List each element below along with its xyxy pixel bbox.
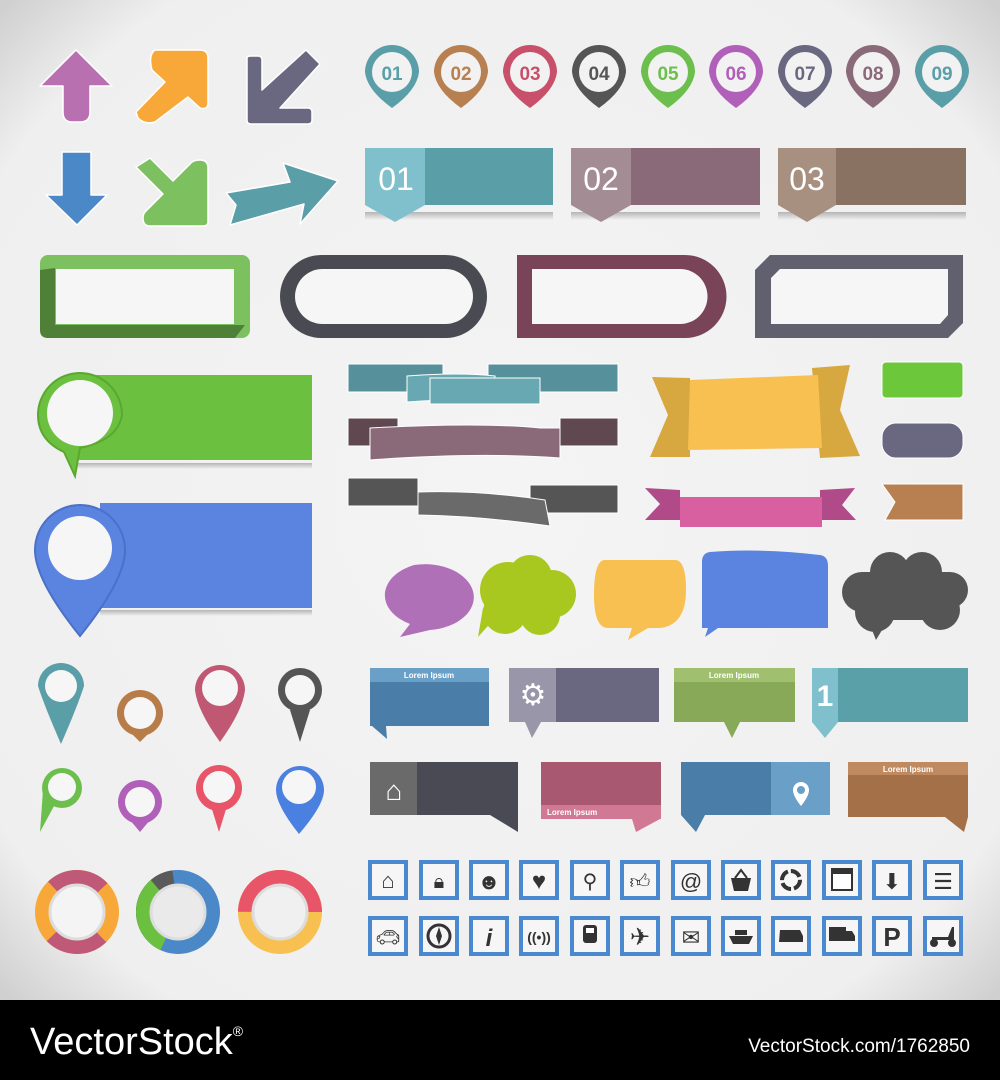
icon tiles row 1: @ xyxy=(680,869,702,894)
frame: maroon xyxy=(517,255,726,338)
box: green lorem: Lorem Ipsum xyxy=(709,671,759,680)
pin: brown xyxy=(117,690,163,742)
banner: yellow xyxy=(650,365,860,458)
icon tiles row 1: ♥ xyxy=(532,868,546,895)
pin banner: blue xyxy=(35,503,312,636)
pin 04: 04 xyxy=(588,64,610,85)
pin 08 xyxy=(846,45,900,108)
box: green lorem xyxy=(674,668,795,738)
footer: url: VectorStock.com/1762850 xyxy=(748,1036,970,1057)
icon: gray south-west arrow xyxy=(247,50,320,124)
box: blue lorem xyxy=(370,668,489,739)
ribbon: gray xyxy=(348,478,618,526)
ring: red/yellow xyxy=(245,877,315,947)
box: blue with pin xyxy=(681,762,830,832)
ring: gray/blue/green xyxy=(143,877,213,947)
bubble: blue rect xyxy=(702,551,828,637)
bubble: orange xyxy=(594,560,686,640)
box: brown lorem xyxy=(848,762,968,832)
pin 02: 02 xyxy=(450,64,472,85)
arrows group xyxy=(40,50,338,226)
pin 07 xyxy=(778,45,832,108)
footer bar xyxy=(0,1000,1000,1080)
icon tiles row 1 xyxy=(370,862,961,898)
pin 09 xyxy=(915,45,969,108)
icon tiles grid xyxy=(370,862,961,954)
pin: blue xyxy=(276,766,324,834)
icon tiles row 2: i xyxy=(486,925,494,952)
icon tiles row 2: ✉ xyxy=(682,925,700,950)
pin 07: 07 xyxy=(794,64,816,85)
icon: blue down arrow xyxy=(46,152,107,225)
frame: green rectangle xyxy=(40,255,250,338)
pin 01 xyxy=(365,45,419,108)
numbered banners xyxy=(365,148,966,222)
ribbon: teal xyxy=(348,364,618,404)
box: pink lorem: Lorem Ipsum xyxy=(547,808,597,817)
icon tiles row 1: ⚲ xyxy=(583,871,597,893)
pin 05 xyxy=(641,45,695,108)
pin: purple xyxy=(118,780,162,832)
footer: brand: VectorStock xyxy=(30,1021,233,1063)
ring: orange/pink xyxy=(42,877,112,947)
bubble: dark cloud xyxy=(842,552,968,640)
pin 06 xyxy=(709,45,763,108)
pin 04 xyxy=(572,45,626,108)
frame: gray chamfered xyxy=(755,255,963,338)
frames row xyxy=(40,255,963,338)
banner 01 xyxy=(365,148,553,222)
box: gear xyxy=(509,668,659,738)
pin: dark xyxy=(278,668,322,742)
pin 05: 05 xyxy=(657,64,679,85)
box: home: ⌂ xyxy=(386,775,402,806)
icon tiles row 1: 🔒︎ xyxy=(434,871,444,893)
box: pink lorem xyxy=(541,762,661,832)
box: teal number xyxy=(812,668,968,738)
speech boxes row 2 xyxy=(370,762,968,832)
footer: brand: ® xyxy=(233,1023,244,1039)
pin 09: 09 xyxy=(931,64,953,85)
ribbons xyxy=(348,364,618,526)
bubble: green cloud xyxy=(478,555,576,637)
box: gear: ⚙ xyxy=(520,679,546,712)
banner 02: 02 xyxy=(583,161,619,197)
banner 02 xyxy=(571,148,760,222)
icon: green south-east arrow xyxy=(136,158,208,226)
pin: pink xyxy=(195,665,245,742)
icon tiles row 1: ⬇ xyxy=(883,869,901,894)
icon tiles row 1: ⌂ xyxy=(381,868,395,893)
tab: green xyxy=(882,362,963,398)
icon tiles row 2: ✈ xyxy=(630,924,650,951)
box: brown lorem: Lorem Ipsum xyxy=(883,765,933,774)
banner 03 xyxy=(778,148,966,222)
pin banner: green xyxy=(38,373,312,476)
frame: dark pill xyxy=(280,255,487,338)
banner: pink xyxy=(645,488,856,527)
icon: orange north-east arrow xyxy=(136,50,208,123)
pin 03 xyxy=(503,45,557,108)
icon: teal right arrow xyxy=(226,163,338,225)
small location pins xyxy=(38,663,324,834)
icon tiles row 2 xyxy=(370,918,961,954)
icon tiles row 1: ☻ xyxy=(477,869,501,894)
pin 06: 06 xyxy=(725,64,747,85)
icon tiles row 1: ☰ xyxy=(933,869,953,894)
icon tiles row 2: ((•)) xyxy=(527,929,551,945)
pin 02 xyxy=(434,45,488,108)
bubble: purple oval xyxy=(385,564,474,637)
icon tiles row 1: 👍︎ xyxy=(630,871,651,893)
ribbon: mauve xyxy=(348,418,618,460)
banner 01: 01 xyxy=(378,161,414,197)
box: teal number: 1 xyxy=(817,680,833,713)
speech bubbles xyxy=(385,551,968,640)
cycle rings xyxy=(42,877,315,947)
box: home xyxy=(370,762,518,832)
tab: brown xyxy=(882,484,963,520)
icon tiles row 2: 🚗︎ xyxy=(375,927,401,949)
pin 08: 08 xyxy=(862,64,884,85)
pin: green xyxy=(40,768,82,832)
icon: purple up arrow xyxy=(40,50,112,122)
pin: red xyxy=(196,765,242,832)
box: blue lorem: Lorem Ipsum xyxy=(404,671,454,680)
numbered pins row xyxy=(365,45,969,108)
speech boxes row 1 xyxy=(370,668,968,739)
pin 01: 01 xyxy=(381,64,403,85)
banner 03: 03 xyxy=(789,161,825,197)
icon tiles row 2: P xyxy=(883,922,901,952)
tab: purple gray xyxy=(882,423,963,458)
pin: teal xyxy=(38,663,84,744)
pin 03: 03 xyxy=(519,64,541,85)
